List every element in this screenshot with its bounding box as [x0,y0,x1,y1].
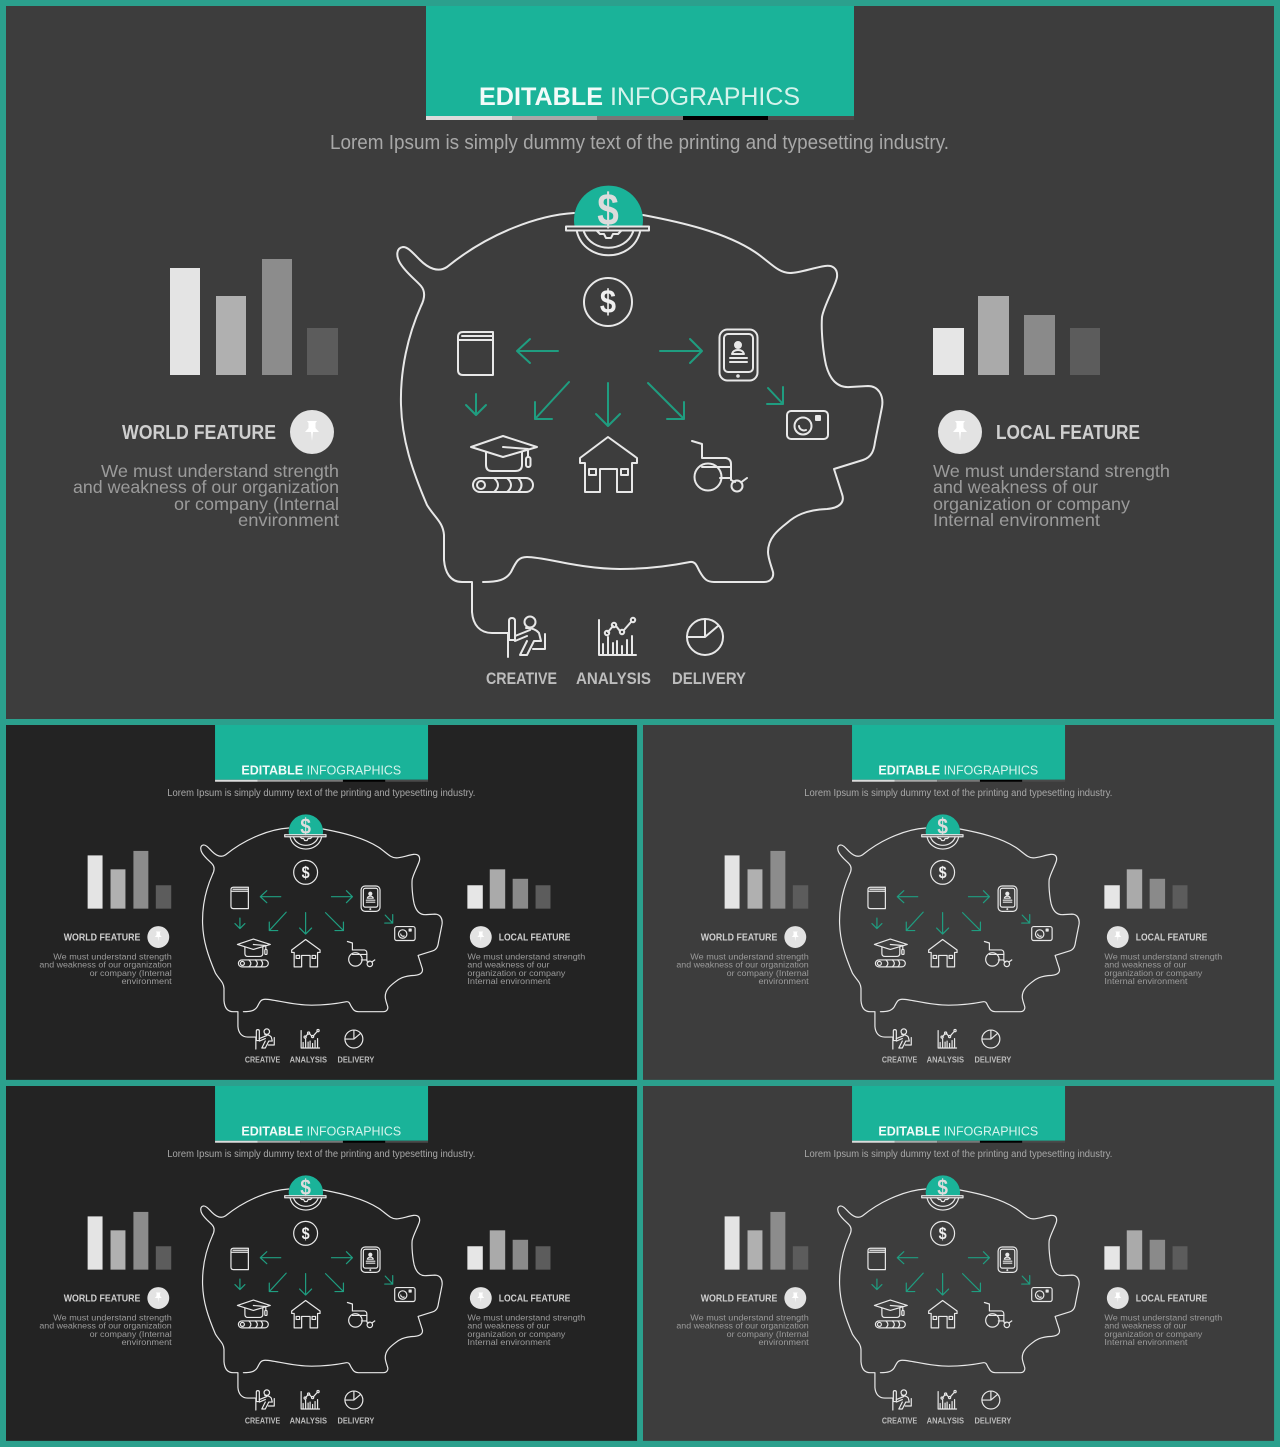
infographic artwork [725,1086,1187,1410]
panel text [676,763,1222,1064]
panel text: and weakness of our [467,1320,550,1330]
panel text: We must understand strength [690,951,809,961]
panel text: Internal environment [1104,1337,1188,1347]
heading: local feature: LOCAL FEATURE [996,422,1140,444]
panel background [643,725,1274,1080]
icon: creative, person at desk [508,616,545,657]
icon: tablet with profile [720,330,758,380]
panel text: We must understand strength [53,1312,172,1322]
infographic artwork [725,725,1187,1049]
infographic artwork [88,725,550,1049]
header banner [426,6,854,120]
panel text: We must understand strength [467,1312,585,1322]
text block: local feature: organization or company [933,494,1130,514]
icon: camera [787,411,828,439]
piggy bank outline [397,213,882,633]
text block: world feature [73,461,339,530]
panel text: organization or company [467,968,566,978]
panel text: We must understand strength [1104,951,1222,961]
text block: local feature [933,461,1170,530]
panel text: CREATIVE [882,1415,918,1425]
icon: dollar circle: $ [600,283,616,320]
icon: book [458,332,493,375]
panel text: DELIVERY [337,1415,375,1425]
text block: world feature: and weakness of our organization [73,477,339,497]
panel: small slide, dark, top left [6,725,637,1080]
panel text: or company (Internal [727,968,809,978]
panel text: Lorem Ipsum is simply dummy text of the printing and typesetting industry. [804,788,1112,799]
main panel background [6,6,1274,719]
heading: world feature: WORLD FEATURE [122,422,276,444]
panel text: INFOGRAPHICS [307,1124,401,1138]
panel text: and weakness of our [1104,959,1187,969]
text block: world feature: or company (Internal [174,494,339,514]
panel text: DELIVERY [974,1054,1012,1064]
labels: creative, analysis, delivery: CREATIVE [486,669,557,688]
panel text: Internal environment [467,976,551,986]
panel text: and weakness of our organization [676,959,809,969]
right bar chart [933,296,1100,375]
panel text: and weakness of our [467,959,550,969]
title [479,83,800,111]
panel text: DELIVERY [337,1054,375,1064]
title: INFOGRAPHICS [610,83,800,111]
panel text: CREATIVE [245,1415,281,1425]
title: EDITABLE [479,83,603,111]
panel text: EDITABLE [241,1124,303,1138]
panel text: Lorem Ipsum is simply dummy text of the printing and typesetting industry. [167,788,475,799]
panel text: CREATIVE [245,1054,281,1064]
panel text: LOCAL FEATURE [1136,933,1208,944]
panel text: Lorem Ipsum is simply dummy text of the printing and typesetting industry. [804,1149,1112,1160]
panel text: LOCAL FEATURE [499,1294,571,1305]
text block: world feature: environment [238,510,339,530]
text block: local feature: and weakness of our [933,477,1098,497]
panel text: INFOGRAPHICS [944,1124,1038,1138]
panel: main slide [6,6,1274,719]
panel text: WORLD FEATURE [701,1294,778,1305]
panel text: organization or company [1104,1329,1203,1339]
panel text: ANALYSIS [290,1415,327,1425]
panel text: organization or company [1104,968,1203,978]
panel text: or company (Internal [90,1329,172,1339]
text block: local feature: Internal environment [933,510,1100,530]
subtitle: Lorem Ipsum is simply dummy text of the printing and typesetting industry. [330,132,949,154]
panel text: We must understand strength [690,1312,809,1322]
labels: creative, analysis, delivery: ANALYSIS [576,669,651,688]
panel text [676,1124,1222,1425]
panel text: We must understand strength [53,951,172,961]
panel text: environment [121,976,172,986]
icon: coin dropping into slot: $ [597,184,619,235]
icon: house [580,437,637,492]
icon: delivery pie chart [687,619,723,655]
panel text: and weakness of our [1104,1320,1187,1330]
panel text: and weakness of our organization [676,1320,809,1330]
panel text: environment [121,1337,172,1347]
panel text: CREATIVE [882,1054,918,1064]
infographic artwork [170,6,1100,657]
panel: small slide, dark, bottom left [6,1086,637,1441]
icon: wheelchair [692,441,747,492]
panel background [6,725,637,1080]
panel: small slide, grey, top right [643,725,1274,1080]
panel text: and weakness of our organization [39,1320,172,1330]
panel text: WORLD FEATURE [64,933,141,944]
icon: dollar circle [584,278,632,326]
panel text: environment [758,1337,809,1347]
panel text: ANALYSIS [290,1054,327,1064]
panel text: Internal environment [467,1337,551,1347]
panel text: environment [758,976,809,986]
text block: local feature: We must understand strength [933,461,1170,481]
panel text [39,1124,585,1425]
icon: left pin badge [290,410,334,454]
labels: creative, analysis, delivery: DELIVERY [672,669,747,688]
panel: small slide, grey, bottom right [643,1086,1274,1441]
panel text: LOCAL FEATURE [499,933,571,944]
panel text: WORLD FEATURE [701,933,778,944]
panel text: Internal environment [1104,976,1188,986]
left bar chart [170,259,338,375]
panel text: organization or company [467,1329,566,1339]
panel text: LOCAL FEATURE [1136,1294,1208,1305]
arrows [466,339,783,426]
panel text: WORLD FEATURE [64,1294,141,1305]
panel background [643,1086,1274,1441]
panel text: Lorem Ipsum is simply dummy text of the printing and typesetting industry. [167,1149,475,1160]
panel text: DELIVERY [974,1415,1012,1425]
panel text: EDITABLE [878,1124,940,1138]
panel text: INFOGRAPHICS [307,763,401,777]
panel text: or company (Internal [90,968,172,978]
infographic artwork [88,1086,550,1410]
icon: graduation cap and scroll [471,436,537,492]
panel text: and weakness of our organization [39,959,172,969]
panel text: EDITABLE [878,763,940,777]
panel text: ANALYSIS [927,1054,964,1064]
panel text: EDITABLE [241,763,303,777]
icon: right pin badge [938,410,982,454]
panel text: We must understand strength [467,951,585,961]
panel text: INFOGRAPHICS [944,763,1038,777]
panel text: ANALYSIS [927,1415,964,1425]
panel text: or company (Internal [727,1329,809,1339]
icon: coin dropping into slot [566,184,649,255]
panel background [6,1086,637,1441]
panel text [39,763,585,1064]
panel text: We must understand strength [1104,1312,1222,1322]
icon: analysis line chart [599,618,636,655]
text block: world feature: We must understand strength [101,461,339,481]
labels: creative, analysis, delivery [486,669,747,688]
